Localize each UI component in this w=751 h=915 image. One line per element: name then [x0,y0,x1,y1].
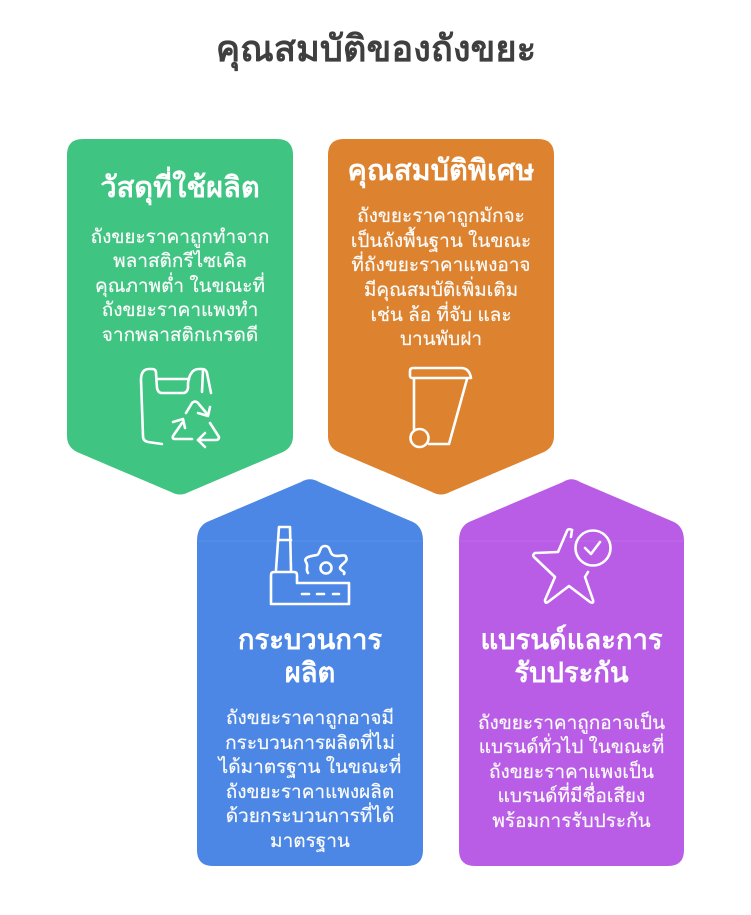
text: production process: ด้วยกระบวนการที่ได้ [226,806,394,827]
text: brand and warranty [478,711,665,832]
panel: production process background [197,479,423,866]
text: brand and warranty: ถังขยะราคาแพงเป็น [489,762,654,783]
heading: brand and warranty: แบรนด์และการ [480,624,663,655]
text: special features: มีคุณสมบัติเพิ่มเติม [364,280,518,301]
heading: production process: ผลิต [285,656,335,688]
text: brand and warranty: พร้อมการรับประกัน [492,811,651,832]
panel: brand and warranty background [459,479,684,866]
text: materials: จากพลาสติกเกรดดี [102,325,258,346]
text: special features: เป็นถังพื้นฐาน ในขณะ [351,231,531,252]
heading: production process: กระบวนการ [238,624,382,655]
text: production process: ได้มาตรฐาน ในขณะที่ [219,757,401,778]
text: materials: คุณภาพต่ำ ในขณะที่ [95,276,265,297]
text: special features: ถังขยะราคาถูกมักจะ [357,206,525,227]
heading: special features: คุณสมบัติพิเศษ [348,155,534,187]
heading: brand and warranty: รับประกัน [514,656,629,688]
title: คุณสมบัติของถังขยะ [216,28,536,69]
text: materials [91,227,269,346]
text: production process: ถังขยะราคาถูกอาจมี [226,708,394,729]
text: special features: บานพับฝา [400,329,482,350]
icon: factory with gear [271,527,349,604]
panel: materials background [67,139,293,494]
text: brand and warranty: ถังขยะราคาถูกอาจเป็น [478,712,665,734]
text: production process: ถังขยะราคาแพงผลิต [226,782,394,803]
text: production process: มาตรฐาน [270,831,350,852]
text: materials: ถังขยะราคาแพงทำ [102,300,258,321]
text: special features: ที่ถังขยะราคาแพงอาจ [351,255,531,276]
text: materials: ถังขยะราคาถูกทำจาก [91,227,269,248]
text: special features [351,206,531,350]
icon: plastic bag with recycling arrows [141,369,219,447]
text: materials: พลาสติกรีไซเคิล [113,251,247,272]
text: brand and warranty: แบรนด์ที่มีชื่อเสียง [498,786,645,807]
text: special features: เช่น ล้อ ที่จับ และ [370,305,512,326]
heading: production process [238,624,382,688]
heading: brand and warranty [480,624,663,688]
icon: star with check badge [533,529,610,603]
panel: special features background [328,139,554,494]
text: brand and warranty: แบรนด์ทั่วไป ในขณะที่ [479,737,664,758]
heading: materials: วัสดุที่ใช้ผลิต [100,172,260,204]
text: production process [217,708,401,852]
text: production process: กระบวนการผลิตที่ไม่ [225,733,395,754]
icon: wheeled trash bin [410,368,471,447]
